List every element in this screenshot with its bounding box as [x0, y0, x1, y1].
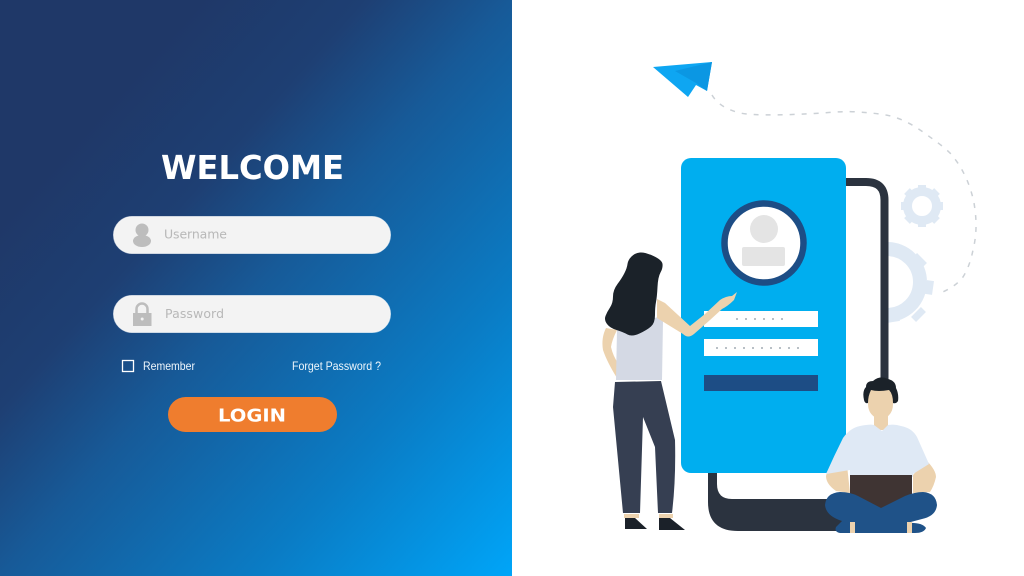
- username input: [114, 216, 390, 254]
- icon: user: [133, 224, 151, 247]
- laptop: [850, 475, 912, 508]
- illustration: phone login scene: [602, 62, 976, 533]
- legs: [825, 492, 937, 533]
- phone frame: [840, 182, 884, 390]
- submit bar: [704, 375, 818, 391]
- icon: large gear: [888, 242, 934, 323]
- forget password link: Forget Password ?: [292, 359, 381, 373]
- left arm: [602, 328, 618, 378]
- pants: [613, 381, 675, 513]
- heading: welcome: WELCOME: [161, 148, 344, 187]
- panel: login form background: [0, 0, 512, 576]
- password input: [114, 296, 390, 332]
- phone screen: [681, 158, 846, 473]
- face: [868, 388, 893, 420]
- password field: [704, 339, 818, 356]
- login button: [168, 397, 337, 432]
- remember checkbox: [122, 359, 195, 373]
- avatar: [724, 204, 804, 282]
- icon: padlock: [133, 304, 152, 326]
- ankles: [850, 522, 912, 533]
- figure: woman: [602, 252, 737, 530]
- shoes: [625, 518, 685, 530]
- username field: [704, 311, 818, 327]
- ankles: [624, 514, 673, 518]
- icon: small gear: [901, 185, 943, 227]
- login button: LOGIN: [218, 406, 286, 426]
- figure: man with laptop: [825, 377, 937, 533]
- right arm: [657, 292, 737, 336]
- arms: [826, 460, 936, 493]
- shirt: [826, 425, 929, 477]
- neck: [874, 412, 888, 430]
- username placeholder: Username: [164, 226, 227, 242]
- dashed flight path: [712, 95, 976, 294]
- shirt: [616, 317, 663, 380]
- remember label: Remember: [143, 359, 195, 373]
- password placeholder: Password: [165, 306, 224, 321]
- hair: [605, 252, 663, 336]
- icon: paper plane: [653, 62, 712, 97]
- hair: [863, 377, 898, 403]
